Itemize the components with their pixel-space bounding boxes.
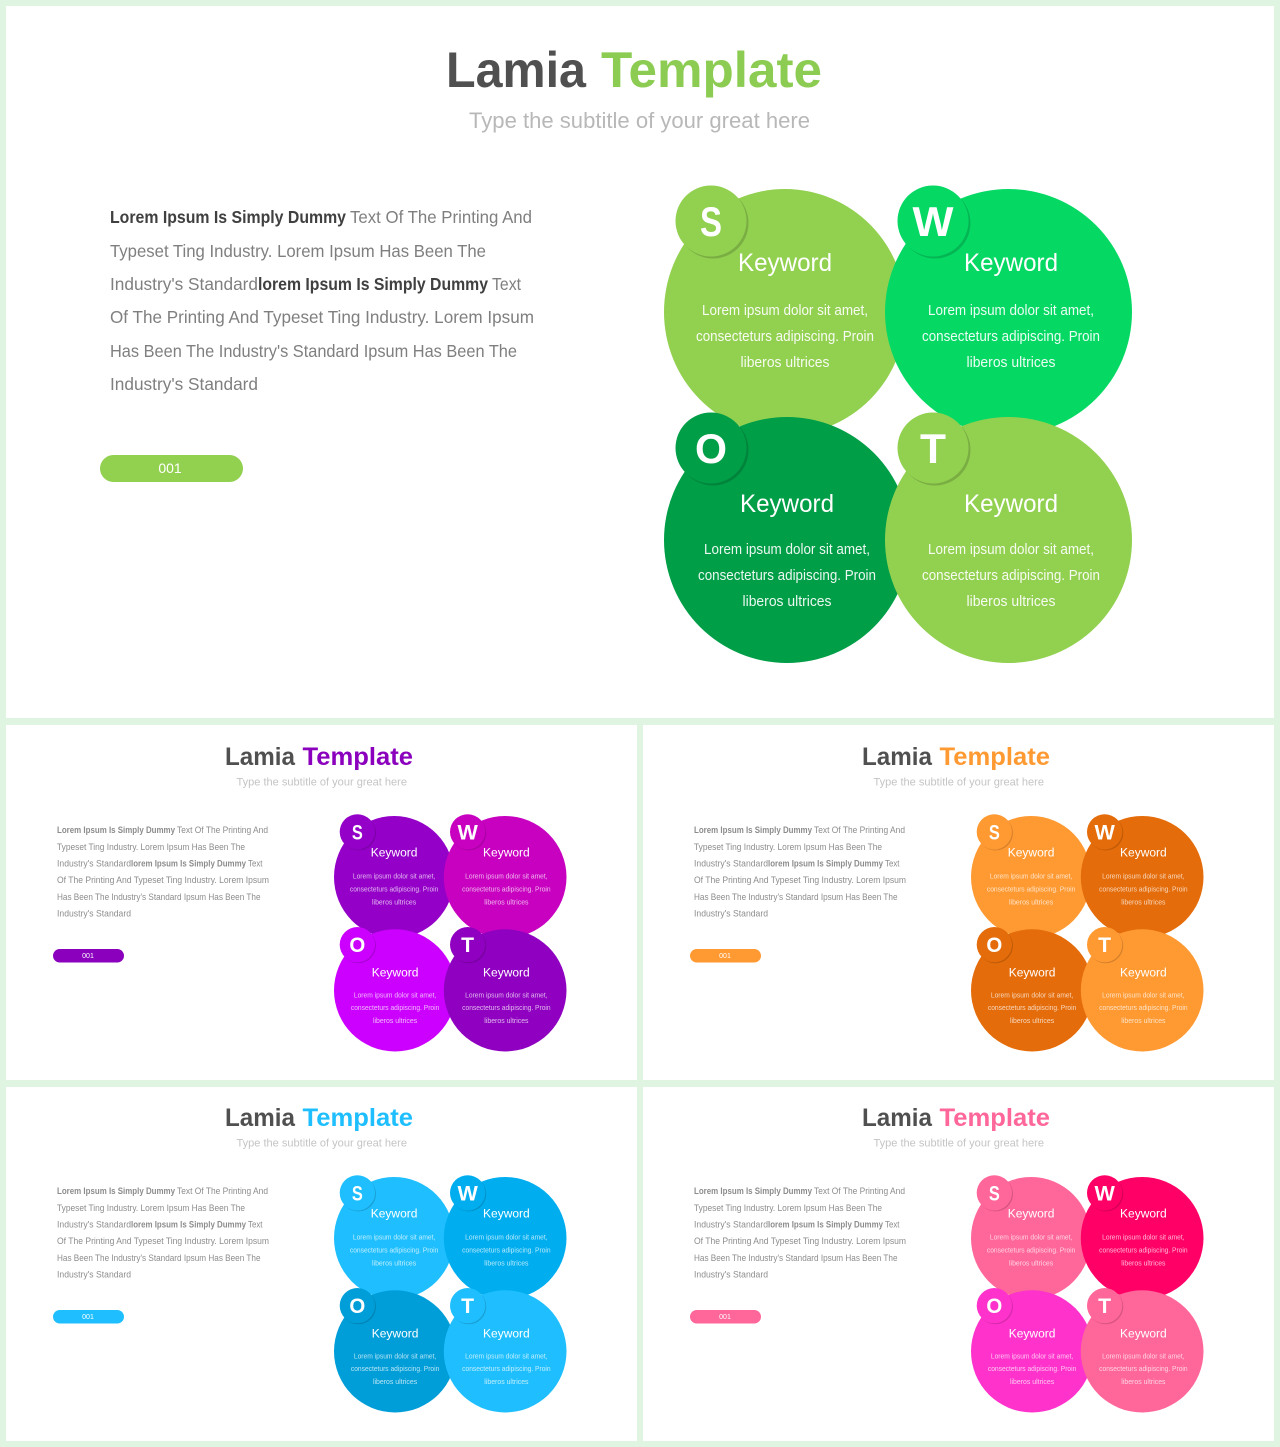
S badge: S: [352, 1182, 363, 1205]
body text: [694, 1186, 906, 1280]
body text: Lorem Ipsum Is Simply Dummy: [694, 825, 812, 835]
S circle: consecteturs adipiscing. Proin: [987, 885, 1075, 894]
T badge: [450, 927, 486, 963]
S circle: Lorem ipsum dolor sit amet,: [990, 872, 1072, 881]
W circle: Keyword: [1120, 846, 1167, 860]
pill: 001: [53, 1310, 124, 1324]
pill: 001: 001: [719, 1314, 731, 1321]
W circle: Keyword: [483, 846, 530, 860]
S circle: Keyword: [1008, 1207, 1055, 1221]
body text: Lorem Ipsum Is Simply Dummy: [110, 207, 346, 227]
title: Template: [601, 42, 822, 98]
O badge: O: [349, 934, 365, 957]
body text: Has Been The Industry's Standard Ipsum Has Been The: [110, 341, 517, 361]
title: Lamia: [862, 743, 933, 771]
S circle: [971, 816, 1091, 938]
S circle: Lorem ipsum dolor sit amet,: [702, 303, 868, 319]
W circle: Lorem ipsum dolor sit amet,: [928, 303, 1094, 319]
T circle: [444, 929, 567, 1051]
body text: Has Been The Industry's Standard Ipsum Has Been The: [694, 892, 898, 902]
T circle: consecteturs adipiscing. Proin: [462, 1364, 551, 1373]
T circle: [1081, 1290, 1204, 1412]
body text: Text: [885, 1220, 900, 1230]
SWOT chart: [334, 814, 567, 1051]
body text: lorem Ipsum Is Simply Dummy: [131, 858, 246, 868]
body text: Industry's Standard: [57, 1270, 131, 1280]
O circle: Keyword: [1009, 965, 1056, 979]
O circle: consecteturs adipiscing. Proin: [351, 1003, 439, 1012]
body text: Of The Printing And Typeset Ting Industry. Lorem Ipsum: [57, 1236, 269, 1246]
S circle: Lorem ipsum dolor sit amet,: [990, 1233, 1072, 1242]
O circle: consecteturs adipiscing. Proin: [988, 1364, 1076, 1373]
W circle: [1081, 816, 1204, 938]
W circle: consecteturs adipiscing. Proin: [1099, 885, 1188, 894]
slide: orange: [690, 743, 1204, 1051]
subtitle: Type the subtitle of your great here: [236, 776, 407, 788]
slide: blue: [53, 1104, 567, 1412]
S circle: Lorem ipsum dolor sit amet,: [353, 1233, 435, 1242]
O badge: [340, 1288, 376, 1324]
O circle: Keyword: [372, 1326, 419, 1340]
O circle: Keyword: [1009, 1326, 1056, 1340]
title: Lamia: [862, 1104, 933, 1132]
S circle: consecteturs adipiscing. Proin: [987, 1246, 1075, 1255]
body text: Lorem Ipsum Is Simply Dummy: [57, 1186, 175, 1196]
O circle: Keyword: [740, 490, 834, 518]
T circle: liberos ultrices: [1121, 1377, 1166, 1386]
O circle: liberos ultrices: [373, 1377, 418, 1386]
title: Template: [940, 1104, 1050, 1132]
pill: 001: [690, 1310, 761, 1324]
W circle: [885, 189, 1132, 435]
O circle: consecteturs adipiscing. Proin: [351, 1364, 439, 1373]
S circle: Lorem ipsum dolor sit amet,: [353, 872, 435, 881]
T circle: Keyword: [483, 965, 530, 979]
O badge: O: [986, 934, 1002, 957]
T circle: liberos ultrices: [1121, 1016, 1166, 1025]
S badge: [676, 186, 748, 258]
T circle: liberos ultrices: [966, 594, 1056, 610]
W badge: [1087, 1175, 1123, 1212]
W circle: consecteturs adipiscing. Proin: [1099, 1246, 1188, 1255]
T circle: [1081, 929, 1204, 1051]
body text: Industry's Standard: [694, 858, 768, 868]
T circle: Keyword: [1120, 965, 1167, 979]
W circle: Keyword: [964, 249, 1058, 277]
subtitle: Type the subtitle of your great here: [874, 776, 1044, 788]
S circle: liberos ultrices: [372, 1258, 417, 1267]
W badge: W: [457, 1182, 478, 1205]
body text: lorem Ipsum Is Simply Dummy: [258, 274, 488, 294]
S circle: Keyword: [1008, 846, 1055, 860]
subtitle: Type the subtitle of your great here: [874, 1138, 1044, 1150]
body text: Industry's Standard: [57, 908, 131, 918]
T badge: [1087, 1288, 1123, 1324]
body text: [57, 1186, 269, 1280]
O circle: Keyword: [372, 965, 419, 979]
W circle: [1081, 1177, 1204, 1299]
W circle: Lorem ipsum dolor sit amet,: [1102, 1233, 1185, 1242]
O circle: [971, 929, 1093, 1051]
S badge: S: [700, 198, 722, 245]
title: Lamia: [225, 743, 296, 771]
O badge: [977, 927, 1013, 963]
W circle: [444, 816, 567, 938]
W badge: [1087, 814, 1123, 851]
S circle: Keyword: [371, 846, 418, 860]
S circle: [334, 816, 454, 938]
W circle: consecteturs adipiscing. Proin: [922, 329, 1100, 345]
W circle: consecteturs adipiscing. Proin: [462, 1246, 551, 1255]
slide: purple: [53, 743, 567, 1051]
O badge: O: [986, 1295, 1002, 1318]
title: [862, 743, 1050, 771]
subtitle: Type the subtitle of your great here: [469, 108, 810, 133]
title: [225, 1104, 413, 1132]
T circle: consecteturs adipiscing. Proin: [1099, 1003, 1188, 1012]
T circle: [444, 1290, 567, 1412]
body text: Of The Printing And Typeset Ting Industry. Lorem Ipsum: [57, 875, 269, 885]
title: [225, 743, 413, 771]
title: Template: [940, 743, 1050, 771]
title: Template: [302, 743, 413, 771]
pill: 001: [100, 455, 243, 482]
W circle: Keyword: [483, 1207, 530, 1221]
body text: Industry's Standard: [694, 908, 768, 918]
body text: [110, 207, 534, 394]
W circle: Lorem ipsum dolor sit amet,: [465, 1233, 548, 1242]
body text: [57, 825, 269, 918]
T circle: Keyword: [964, 490, 1058, 518]
T circle: consecteturs adipiscing. Proin: [922, 568, 1100, 584]
T circle: Keyword: [483, 1326, 530, 1340]
body text: Of The Printing And Typeset Ting Industry. Lorem Ipsum: [110, 307, 534, 327]
body text: Industry's Standard: [57, 858, 131, 868]
O circle: Lorem ipsum dolor sit amet,: [991, 990, 1073, 999]
O circle: liberos ultrices: [373, 1016, 418, 1025]
O badge: [340, 927, 376, 963]
S badge: [977, 814, 1013, 851]
S circle: [334, 1177, 454, 1299]
O badge: O: [695, 425, 727, 472]
O badge: [676, 412, 748, 486]
pill: 001: [690, 949, 761, 962]
W badge: W: [457, 821, 478, 844]
T badge: T: [461, 934, 474, 957]
S circle: Keyword: [738, 249, 832, 277]
T circle: Lorem ipsum dolor sit amet,: [928, 542, 1094, 558]
T circle: liberos ultrices: [484, 1016, 529, 1025]
T circle: Lorem ipsum dolor sit amet,: [1102, 990, 1185, 999]
W badge: [450, 1175, 486, 1212]
S circle: Keyword: [371, 1207, 418, 1221]
T circle: [885, 417, 1132, 663]
body text: Industry's Standard: [110, 374, 258, 394]
body text: Typeset Ting Industry. Lorem Ipsum Has Been The: [110, 241, 486, 261]
W circle: Keyword: [1120, 1207, 1167, 1221]
body text: Typeset Ting Industry. Lorem Ipsum Has Been The: [694, 1203, 882, 1213]
W circle: liberos ultrices: [484, 1258, 529, 1267]
W circle: Lorem ipsum dolor sit amet,: [1102, 872, 1185, 881]
S badge: S: [989, 1182, 1000, 1205]
O circle: Lorem ipsum dolor sit amet,: [704, 542, 870, 558]
W circle: liberos ultrices: [1121, 1258, 1166, 1267]
slide: green main: [100, 42, 1132, 663]
SWOT chart: [664, 186, 1132, 663]
W circle: consecteturs adipiscing. Proin: [462, 885, 551, 894]
body text: Text: [248, 858, 263, 868]
O circle: liberos ultrices: [1010, 1377, 1055, 1386]
W badge: W: [1094, 1182, 1115, 1205]
T circle: Keyword: [1120, 1326, 1167, 1340]
body text: Text Of The Printing And: [814, 825, 905, 835]
O circle: Lorem ipsum dolor sit amet,: [354, 1351, 436, 1360]
O circle: Lorem ipsum dolor sit amet,: [354, 990, 436, 999]
W circle: liberos ultrices: [1121, 897, 1166, 906]
S badge: S: [352, 821, 363, 844]
title: Template: [302, 1104, 413, 1132]
O circle: consecteturs adipiscing. Proin: [988, 1003, 1076, 1012]
SWOT chart: [334, 1175, 567, 1412]
S circle: [664, 189, 906, 435]
W circle: [444, 1177, 567, 1299]
body text: Of The Printing And Typeset Ting Industry. Lorem Ipsum: [694, 1236, 906, 1246]
S badge: S: [989, 821, 1000, 844]
S circle: liberos ultrices: [1009, 1258, 1054, 1267]
body text: Text: [885, 858, 900, 868]
body text: lorem Ipsum Is Simply Dummy: [768, 1220, 883, 1230]
W circle: liberos ultrices: [966, 355, 1056, 371]
pill: 001: 001: [719, 953, 731, 960]
T circle: Lorem ipsum dolor sit amet,: [465, 990, 548, 999]
W circle: liberos ultrices: [484, 897, 529, 906]
body text: Industry's Standard: [694, 1220, 768, 1230]
T circle: Lorem ipsum dolor sit amet,: [465, 1351, 548, 1360]
O circle: liberos ultrices: [742, 594, 832, 610]
body text: Text: [492, 274, 521, 294]
T badge: [450, 1288, 486, 1324]
title: [862, 1104, 1050, 1132]
T circle: consecteturs adipiscing. Proin: [462, 1003, 551, 1012]
W badge: [450, 814, 486, 851]
body text: Text Of The Printing And: [177, 1186, 268, 1196]
O circle: [971, 1290, 1093, 1412]
body text: Industry's Standard: [57, 1220, 131, 1230]
SWOT chart: [971, 814, 1204, 1051]
O circle: [664, 417, 910, 663]
body text: lorem Ipsum Is Simply Dummy: [131, 1220, 246, 1230]
S circle: consecteturs adipiscing. Proin: [350, 885, 438, 894]
body text: Industry's Standard: [110, 274, 258, 294]
pill: 001: 001: [158, 460, 182, 476]
T badge: T: [1098, 1295, 1111, 1318]
slide: pink: [690, 1104, 1204, 1412]
S badge: [977, 1175, 1013, 1212]
body text: [694, 825, 906, 918]
subtitle: Type the subtitle of your great here: [236, 1138, 407, 1150]
title: Lamia: [225, 1104, 296, 1132]
pill: 001: 001: [82, 1314, 94, 1321]
pill: 001: [53, 949, 124, 962]
body text: Has Been The Industry's Standard Ipsum Has Been The: [694, 1253, 898, 1263]
O badge: O: [349, 1295, 365, 1318]
T circle: Lorem ipsum dolor sit amet,: [1102, 1351, 1185, 1360]
S circle: consecteturs adipiscing. Proin: [696, 329, 874, 345]
title: Lamia: [446, 42, 587, 98]
S badge: [340, 1175, 376, 1212]
body text: Of The Printing And Typeset Ting Industry. Lorem Ipsum: [694, 875, 906, 885]
body text: Text: [248, 1220, 263, 1230]
body text: Has Been The Industry's Standard Ipsum Has Been The: [57, 1253, 261, 1263]
SWOT chart: [971, 1175, 1204, 1412]
O circle: Lorem ipsum dolor sit amet,: [991, 1351, 1073, 1360]
title: [446, 42, 822, 98]
body text: Lorem Ipsum Is Simply Dummy: [694, 1186, 812, 1196]
O circle: liberos ultrices: [1010, 1016, 1055, 1025]
W circle: Lorem ipsum dolor sit amet,: [465, 872, 548, 881]
body text: lorem Ipsum Is Simply Dummy: [768, 858, 883, 868]
T badge: T: [461, 1295, 474, 1318]
body text: Text Of The Printing And: [177, 825, 268, 835]
T badge: T: [920, 425, 946, 472]
T badge: T: [1098, 934, 1111, 957]
T badge: [1087, 927, 1123, 963]
body text: Industry's Standard: [694, 1270, 768, 1280]
body text: Typeset Ting Industry. Lorem Ipsum Has Been The: [57, 842, 245, 852]
S circle: liberos ultrices: [740, 355, 830, 371]
O badge: [977, 1288, 1013, 1324]
T circle: consecteturs adipiscing. Proin: [1099, 1364, 1188, 1373]
O circle: consecteturs adipiscing. Proin: [698, 568, 876, 584]
S circle: consecteturs adipiscing. Proin: [350, 1246, 438, 1255]
T circle: liberos ultrices: [484, 1377, 529, 1386]
S circle: liberos ultrices: [372, 897, 417, 906]
S circle: [971, 1177, 1091, 1299]
S badge: [340, 814, 376, 851]
body text: Typeset Ting Industry. Lorem Ipsum Has Been The: [57, 1203, 245, 1213]
W badge: W: [912, 198, 954, 245]
body text: Typeset Ting Industry. Lorem Ipsum Has Been The: [694, 842, 882, 852]
O circle: [334, 1290, 456, 1412]
body text: Has Been The Industry's Standard Ipsum Has Been The: [57, 892, 261, 902]
T badge: [898, 412, 970, 486]
pill: 001: 001: [82, 953, 94, 960]
W badge: [898, 186, 970, 258]
body text: Text Of The Printing And: [814, 1186, 905, 1196]
O circle: [334, 929, 456, 1051]
body text: Text Of The Printing And: [350, 207, 532, 227]
body text: Lorem Ipsum Is Simply Dummy: [57, 825, 175, 835]
W badge: W: [1094, 821, 1115, 844]
S circle: liberos ultrices: [1009, 897, 1054, 906]
